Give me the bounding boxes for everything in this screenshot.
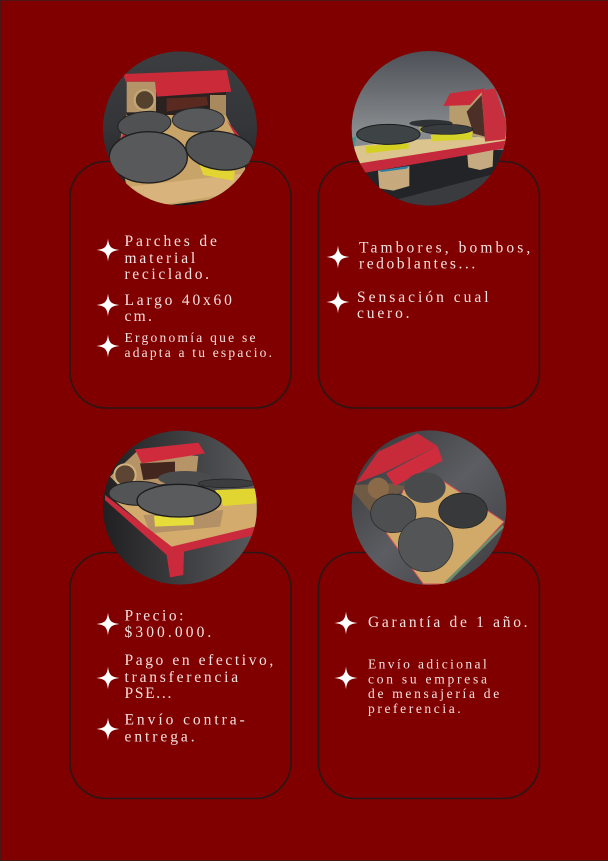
- panel: sounds: [318, 50, 540, 408]
- panel outline: sounds: [318, 162, 540, 408]
- text: leather feel: Sensación cual: [357, 289, 492, 306]
- text: warranty: Garantía de 1 año.: [368, 614, 530, 631]
- feature list: materials: [96, 233, 274, 360]
- icon: sparkle: [96, 612, 120, 636]
- text: shipping: preferencia.: [368, 701, 463, 716]
- text: price: Precio:: [124, 608, 186, 624]
- text: recycled material: reciclado.: [124, 266, 212, 283]
- text: shipping: Envío adicional: [368, 656, 489, 672]
- text: cash on delivery: Envío contra-: [124, 712, 248, 728]
- text: payment methods: PSE...: [124, 685, 173, 702]
- text: shipping: de mensajería de: [368, 686, 502, 701]
- text: size: Largo 40x60: [124, 292, 235, 309]
- icon: sparkle: [96, 294, 120, 316]
- panel outline: materials: [70, 162, 291, 408]
- icon: sparkle: [96, 334, 120, 358]
- icon: sparkle: [96, 718, 120, 740]
- text: size: cm.: [124, 308, 154, 325]
- text: cash on delivery: entrega.: [124, 728, 198, 746]
- text: recycled material: Parches de: [124, 233, 220, 250]
- text: ergonomics: adapta a tu espacio.: [124, 345, 274, 360]
- feature list: payment: [96, 608, 276, 746]
- panel: materials: [70, 50, 291, 408]
- icon: sparkle: [326, 290, 350, 314]
- panel: payment: [70, 430, 291, 798]
- text: payment methods: Pago en efectivo,: [124, 652, 276, 669]
- icon: sparkle: [326, 246, 350, 268]
- text: leather feel: cuero.: [357, 305, 412, 322]
- panel: warranty: [318, 430, 540, 798]
- text: payment methods: transferencia: [124, 669, 241, 686]
- feature list: warranty: [334, 612, 530, 716]
- text: ergonomics: Ergonomía que se: [124, 330, 258, 345]
- text: price: $300.000.: [124, 624, 214, 641]
- icon: sparkle: [334, 612, 358, 634]
- text: drum types: Tambores, bombos,: [359, 240, 533, 256]
- icon: sparkle: [96, 666, 120, 690]
- icon: sparkle: [334, 666, 358, 690]
- photo: overhead view of drum: [350, 430, 510, 587]
- photo: top view of drum with four pads: [100, 50, 260, 207]
- photo: side view of drum: [350, 50, 510, 207]
- panel outline: payment: [70, 552, 291, 798]
- text: recycled material: material: [124, 250, 198, 267]
- panel outline: warranty: [318, 552, 540, 798]
- icon: sparkle: [96, 238, 120, 262]
- photo: angled view of drum: [100, 430, 260, 587]
- text: drum types: redoblantes...: [359, 256, 478, 272]
- feature list: sounds: [326, 240, 533, 322]
- text: shipping: con su empresa: [368, 672, 490, 686]
